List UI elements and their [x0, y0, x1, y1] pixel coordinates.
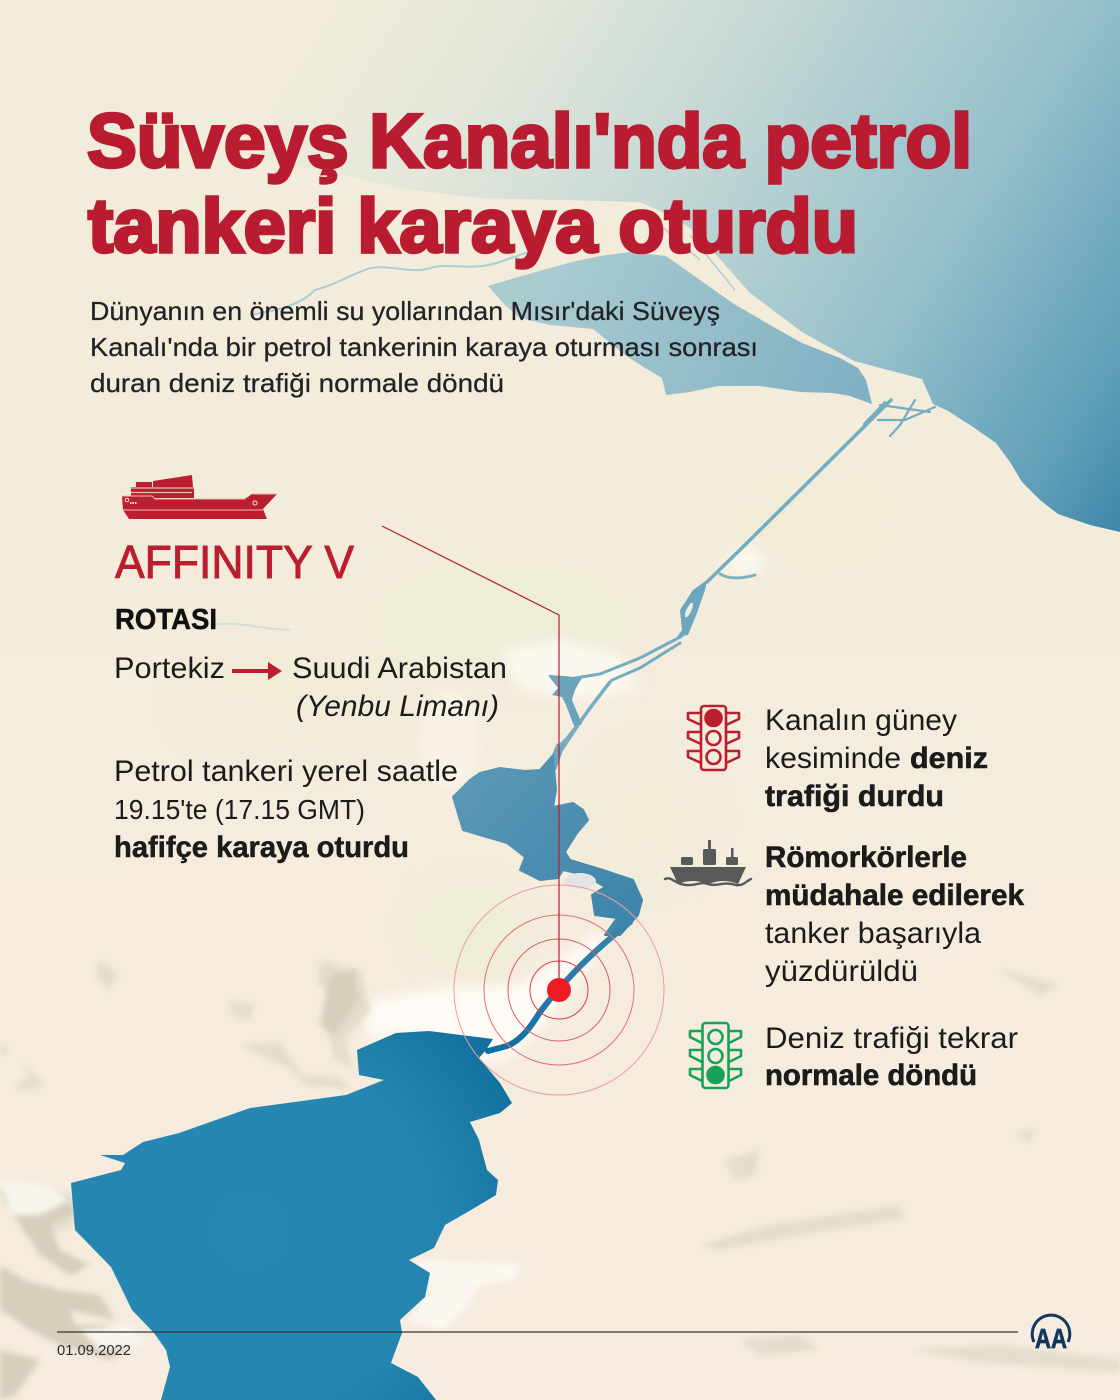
icon: red traffic light [688, 706, 739, 770]
title: tankeri karaya oturdu [88, 184, 858, 269]
status: traffic halted: kesiminde [765, 742, 901, 775]
route text [114, 652, 507, 723]
status: traffic normal: Deniz trafiği tekrar [765, 1022, 1018, 1055]
Nile delta water channels [210, 225, 735, 630]
status: traffic halted [765, 704, 988, 813]
icon: tugboat [665, 840, 751, 885]
intro text: Kanalı'nda bir petrol tankerinin karaya oturması sonrası [90, 332, 758, 362]
Mediterranean sea [0, 0, 1120, 532]
route text: Portekiz [114, 652, 225, 685]
date: 01.09.2022 [57, 1343, 131, 1359]
intro text [90, 296, 758, 398]
status: tugs refloated tanker: müdahale edilerek [765, 879, 1024, 912]
intro text: Dünyanın en önemli su yollarından Mısır'daki Süveyş [90, 296, 720, 326]
incident description: Petrol tankeri yerel saatle [114, 755, 458, 788]
ship name: AFFINITY V [115, 536, 354, 588]
route label: ROTASI [115, 604, 217, 636]
logo: AA [1032, 1315, 1070, 1354]
incident description: hafifçe karaya oturdu [114, 831, 409, 864]
Suez canal north section [556, 400, 935, 752]
status: tugs refloated tanker: tanker başarıyla [765, 917, 981, 950]
Gulf of Suez [71, 1031, 512, 1400]
route text: (Yenbu Limanı) [296, 690, 499, 723]
icon: tanker ship [122, 475, 277, 519]
intro text: duran deniz trafiği normale döndü [90, 368, 504, 398]
route text: Suudi Arabistan [292, 652, 507, 685]
status: tugs refloated tanker [765, 841, 1024, 988]
Bitter Lakes [453, 755, 642, 935]
icon: green traffic light [690, 1023, 741, 1088]
arrow [232, 662, 282, 680]
title [87, 99, 972, 269]
Lake Timsah [548, 675, 582, 726]
status: traffic halted: trafiği durdu [765, 780, 944, 813]
status: traffic normal: normale döndü [765, 1059, 977, 1092]
title: Süveyş Kanalı'nda petrol [87, 99, 972, 184]
logo: AA: AA [1035, 1323, 1067, 1354]
status: traffic halted: deniz [910, 742, 988, 775]
incident description [114, 755, 458, 864]
incident description: 19.15'te (17.15 GMT) [114, 794, 365, 825]
location marker with rings [382, 526, 664, 1095]
Suez canal south section [488, 922, 630, 1051]
status: tugs refloated tanker: Römorkörlerle [765, 841, 967, 874]
status: tugs refloated tanker: yüzdürüldü [765, 955, 918, 988]
canal widening [545, 580, 707, 772]
status: traffic halted: Kanalın güney [765, 704, 957, 737]
Manzala lagoon [488, 252, 872, 404]
status: traffic normal [765, 1022, 1018, 1092]
